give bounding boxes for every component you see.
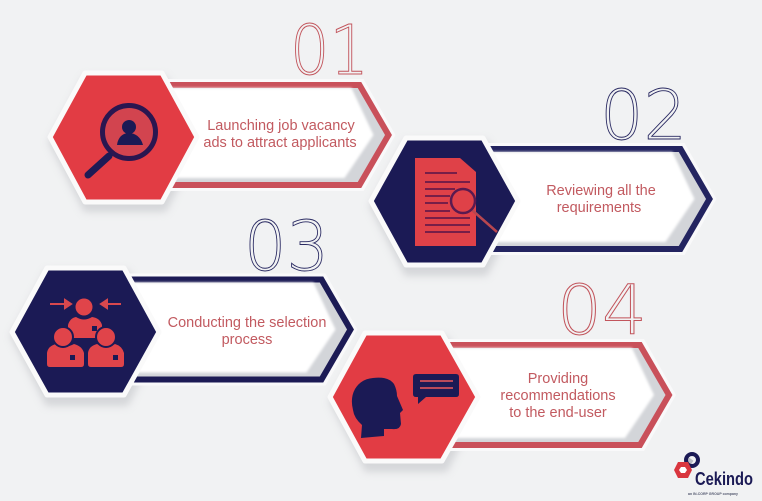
panel: step 2 [369, 138, 716, 276]
icon: magnifier with person [88, 106, 156, 175]
text 4: to the end-user [509, 405, 607, 421]
text 1: Launching job vacancy [207, 118, 356, 134]
number 02: 02 [600, 76, 687, 156]
arrow banner 1 [154, 79, 396, 191]
text 1: ads to attract applicants [203, 135, 357, 151]
number 01: 01 [290, 11, 369, 91]
arrow banner 2 [474, 143, 716, 255]
text 4: Providing [528, 371, 588, 387]
icon: head with speech bubble [352, 374, 459, 438]
logo: Cekindo [674, 454, 753, 496]
hexagon 3 [12, 268, 159, 395]
panel: step 1 [48, 73, 396, 212]
text 3: process [222, 332, 272, 348]
text 2: Reviewing all the [546, 183, 656, 199]
text 3: Conducting the selection [168, 315, 326, 331]
hexagon 2 [371, 138, 518, 265]
icon: three people with arrows [47, 298, 124, 367]
icon: document with magnifier [415, 158, 497, 246]
logo: Cekindo: an IN-CORP GROUP company [688, 491, 739, 496]
hexagon 1 [50, 73, 197, 202]
text 4: recommendations [500, 388, 616, 404]
arrow banner 3 [116, 274, 358, 386]
number 04: 04 [557, 271, 647, 351]
arrow banner 4 [434, 339, 676, 451]
panel: step 4 [329, 333, 676, 472]
text 2: requirements [557, 200, 641, 216]
panel: step 3 [10, 268, 358, 406]
number 03: 03 [244, 207, 329, 287]
hexagon 4 [330, 333, 478, 461]
